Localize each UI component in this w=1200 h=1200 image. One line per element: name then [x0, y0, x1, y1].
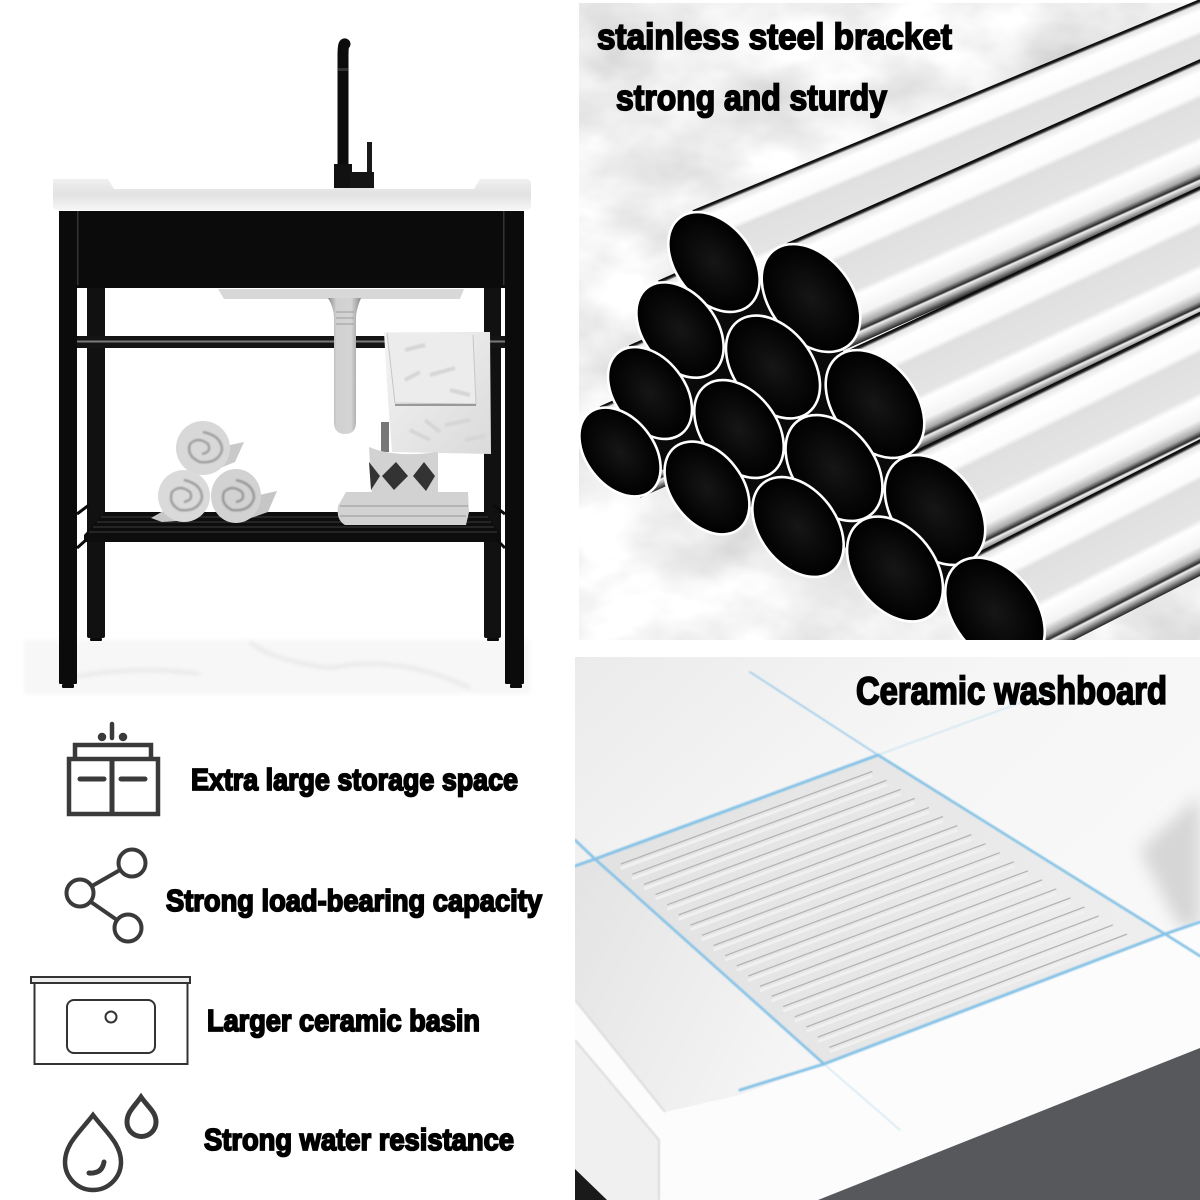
panel: stainless steel tubes — [563, 0, 1200, 686]
marble floor — [24, 640, 530, 694]
blue sealant lines — [575, 672, 1200, 1130]
icon: top-down basin — [31, 977, 190, 1064]
folded towel stack — [338, 492, 469, 525]
panel: ceramic washboard — [575, 657, 1200, 1200]
heading: stainless steel bracket: stainless steel bracket — [597, 16, 952, 57]
rolled towels — [151, 421, 277, 523]
basin underside and drain pipe — [218, 289, 464, 434]
icon: vanity cabinet — [69, 724, 158, 814]
faucet — [334, 44, 374, 188]
ceramic surface — [575, 657, 1200, 1200]
slatted lower shelf — [77, 505, 505, 548]
feature text: storage: Extra large storage space — [191, 762, 518, 797]
panel: sink stand product photo — [24, 44, 531, 694]
feature text: basin: Larger ceramic basin — [207, 1003, 480, 1038]
dark cabinet edge — [818, 1048, 1200, 1200]
icon: share nodes — [66, 850, 146, 942]
marble background — [579, 0, 1200, 640]
feature text: load-bearing: Strong load-bearing capacity — [166, 883, 543, 918]
feature list — [31, 724, 543, 1190]
patterned pot with pump — [369, 422, 438, 502]
dark gaps between tubes — [653, 283, 954, 590]
black metal frame — [59, 211, 524, 688]
icon: water drops — [65, 1097, 156, 1190]
tube openings — [579, 210, 1046, 640]
tube bodies — [600, 0, 1200, 666]
heading: strong and sturdy: strong and sturdy — [616, 77, 887, 118]
washboard ribs — [595, 755, 1165, 1064]
ceramic countertop — [53, 179, 531, 210]
hanging towel — [384, 332, 491, 454]
feature text: water resistance: Strong water resistance — [204, 1122, 514, 1157]
dark corner — [575, 1169, 607, 1200]
